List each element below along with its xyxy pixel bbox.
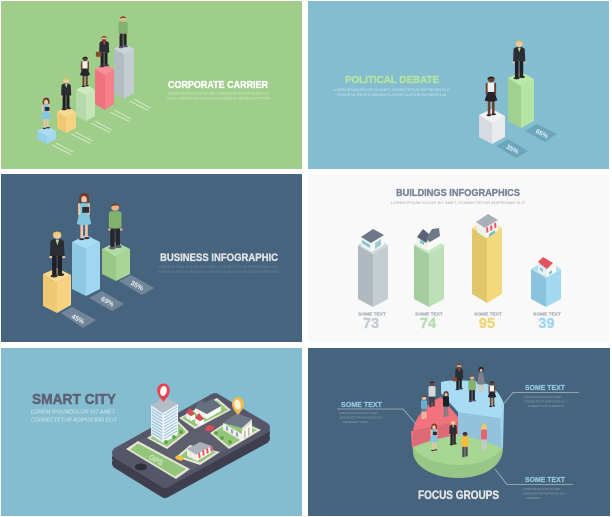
value: some text 74 [415,312,443,332]
panel: business infographic [1,174,302,342]
icon: shop with awning [476,214,499,238]
callout: top right [501,383,579,408]
value: some text 95 [474,312,502,332]
callout: bottom right: PRAESENT [526,496,541,500]
panel: political debate [308,1,609,169]
panel: focus groups [308,348,610,516]
panel: smart city [1,348,302,516]
icon: cars [175,425,215,461]
value tile 69%: 69% [100,296,115,308]
body text: LOREM IPSUM DOLOR SIT AMET, CONSECTETUR ADIPISCING ELIT [168,92,269,96]
value: some text 73 [358,312,386,332]
person: blond man in suit [449,421,457,445]
gps park: GPS [148,454,164,467]
pale green step bar [76,84,95,121]
icon: bank [223,413,252,441]
body text [158,265,278,274]
panel: buildings infographics [308,174,609,342]
callout: left: PRAESENT NUNC. [343,420,369,424]
tower block [147,420,189,449]
value: some text 74: SOME TEXT [415,312,443,318]
callout: left: LOREM IPSUM DOLOR SIT AMET, [339,411,378,415]
callout: left: CONSECTETUR ADIPISCING ELIT [339,416,383,420]
value tile 65%: 65% [534,128,549,140]
heading: CORPORATE CARRIER [168,80,269,91]
value tile 35% [496,139,528,158]
city map [126,397,261,479]
body text [167,92,271,100]
heading: BUILDINGS INFOGRAPHICS [396,188,520,199]
person: woman in black top [443,391,449,417]
bar caption lines [52,99,151,154]
person: man in blue shirt [421,396,427,419]
value tile 35%: 35% [129,280,144,292]
callout: top right: CONSECTETUR ADIPISCING ELIT [524,400,567,404]
grey step bar [114,43,134,99]
body text: CONSECTETUR ADIPISCING ELIT [31,418,118,424]
callout: bottom right: SOME TEXT [525,475,565,484]
value tile 69% [89,291,124,311]
icon: gabled house [416,228,441,251]
blue step bar [37,126,56,144]
icon: houses [186,399,221,426]
body text: LOREM IPSUM DOLOR SIT AMET, CONSECTETUR ADIPISCING ELIT [158,265,278,269]
heading: POLITICAL DEBATE [345,75,439,86]
callout: left: SOME TEXT [341,400,382,409]
body text: FUSCE ULTRICES MASSA EU EROS ELEMENTUM TRISTIQUE PRETIUM [158,270,278,274]
icon: grey roof villa [361,229,384,252]
body text: LOREM IPSUMDOLOR SIT AMET [31,410,116,416]
body text: FUSCE ULTRICES MASSA EU EROS ELEMENTUM TRISTIQUE PORTTITOR [167,96,271,100]
red step bar [95,64,114,110]
body text [31,410,118,424]
icon: yellow map pin [232,397,244,415]
person: woman in blue dress [430,423,438,451]
grey bar [358,236,388,307]
callout: top right: LOREM IPSUM DOLOR SIT AMET, [524,395,562,399]
green bar [508,72,534,128]
callout: top right: PRAESENT NUNC ELEMENTUM [528,404,564,408]
people standing on the pie [421,364,496,457]
value: some text 73: SOME TEXT [358,312,386,318]
value tile 45% [61,307,96,328]
white bar [479,109,505,144]
callout: bottom right: CONSECTETUR ADIPISCING ELIT [522,492,566,496]
value tile 65% [525,124,557,142]
callout: top right: SOME TEXT [525,383,565,392]
panel: corporate carrier [1,1,302,169]
green bar [414,236,444,307]
houses block [179,398,231,429]
person: man with briefcase [452,364,463,390]
yellow step bar [57,106,76,133]
callout: bottom right: LOREM IPSUM DOLOR SIT AMET, [523,487,561,491]
person: woman in grey dress [477,367,485,392]
heading: SMART CITY [32,391,116,408]
person: woman in blue dress [41,98,51,129]
red slice [411,397,458,453]
pie chart [411,380,504,478]
person: woman with black skirt [488,382,496,407]
icon: red map pin [157,384,170,402]
value tile 45%: 45% [70,313,85,326]
yellow bar [43,268,71,313]
bank block [210,418,261,449]
person: man in green sweater [118,16,129,48]
icon: tower [151,397,178,443]
icon: red roof house [538,257,556,277]
green slice [413,435,503,478]
yellow bar [472,219,502,303]
heading: BUSINESS INFOGRAPHIC [160,252,278,264]
person: man in white shirt [428,381,436,407]
subheading: LOREM IPSUM DOLOR SIT AMET, CONSECTETUR ADIPISCING ELIT. [391,200,526,205]
heading: FOCUS GROUPS [418,490,499,502]
person: blond man in suit [61,78,72,110]
icon: shop [187,442,213,461]
person: woman in blue dress [77,193,91,240]
person: man in green sweater [468,375,476,402]
value: some text 95: 95 [479,316,495,332]
icon: trees [164,430,232,444]
body text: FUSCE ULTRICES MASSA EU EROS LUCTUS ELEMENTUM [337,93,446,97]
person: blonde woman in red [481,424,487,450]
person: man in yellow shirt [462,432,468,457]
value tile 35% [119,275,154,295]
blue slice [441,380,504,461]
body text: LOREM IPSUM DOLOR SIT AMET, CONSECTETUR ADIPISCING ELIT [333,88,450,92]
value: some text 39: SOME TEXT [533,312,561,318]
callout: bottom right [495,469,573,500]
value: some text 39: 39 [538,316,555,332]
body text [333,88,450,97]
smartphone [118,399,264,492]
person: blond man in suit [49,232,65,277]
person: woman with black skirt [485,77,497,116]
shop block [176,445,220,465]
value: some text 39 [533,312,561,332]
value: some text 95: SOME TEXT [474,312,502,318]
person: man with briefcase [96,36,109,67]
green bar [102,242,130,281]
value tile 35%: 35% [505,144,520,156]
blue bar [72,235,100,296]
blue bar [531,260,561,307]
callout: left [337,400,416,424]
value: some text 73: 73 [363,316,379,332]
person: blond man in suit [513,41,526,79]
value: some text 74: 74 [420,316,436,332]
person: man in green sweater [108,203,123,249]
person: woman with black skirt [80,57,90,87]
